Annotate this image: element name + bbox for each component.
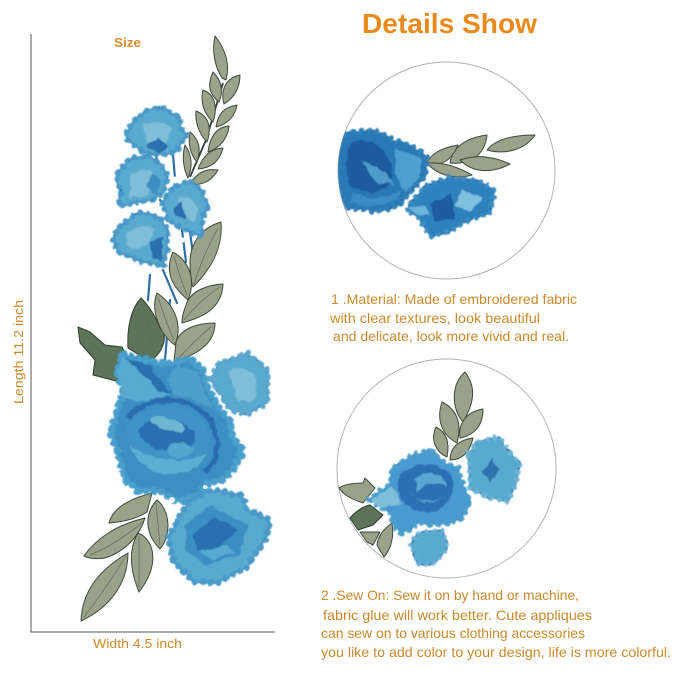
length label: Length 11.2 inch	[11, 300, 26, 404]
material description: with clear textures, look beautiful	[329, 310, 540, 326]
material close-up	[338, 130, 535, 237]
large upper leaves	[78, 222, 223, 382]
upper leaf sprig	[183, 36, 240, 184]
lower leaves	[81, 493, 168, 621]
flower: side bud	[210, 353, 268, 415]
material description: 1 .Material: Made of embroidered fabric	[331, 291, 577, 307]
flower: main rose	[110, 355, 243, 502]
width label: Width 4.5 inch	[93, 636, 182, 651]
sew on description	[321, 587, 671, 660]
flower: fourth bloom	[113, 212, 168, 267]
size heading: Size	[114, 35, 141, 50]
blue blooms	[110, 107, 270, 583]
material description	[329, 291, 577, 344]
detail circle: material	[338, 62, 555, 279]
flower: lower bloom	[168, 490, 270, 583]
material description: and delicate, look more vivid and real.	[333, 328, 569, 344]
sew on close-up	[339, 372, 520, 565]
flower: second bloom	[117, 155, 168, 206]
full applique	[78, 36, 270, 621]
flower stems	[148, 155, 194, 360]
sew on description: can sew on to various clothing accessories	[321, 625, 585, 641]
lace holes	[165, 160, 207, 523]
sew on description: 2 .Sew On: Sew it on by hand or machine,	[321, 587, 579, 603]
flower: third bloom	[162, 180, 208, 237]
flower: top bud	[126, 107, 187, 155]
details heading: Details Show	[362, 8, 537, 39]
sew on description: fabric glue will work better. Cute appliques	[323, 607, 592, 623]
sew on description: you like to add color to your design, life is more colorful.	[321, 644, 671, 660]
detail circle: sew on	[337, 359, 556, 578]
size axes	[31, 34, 275, 632]
